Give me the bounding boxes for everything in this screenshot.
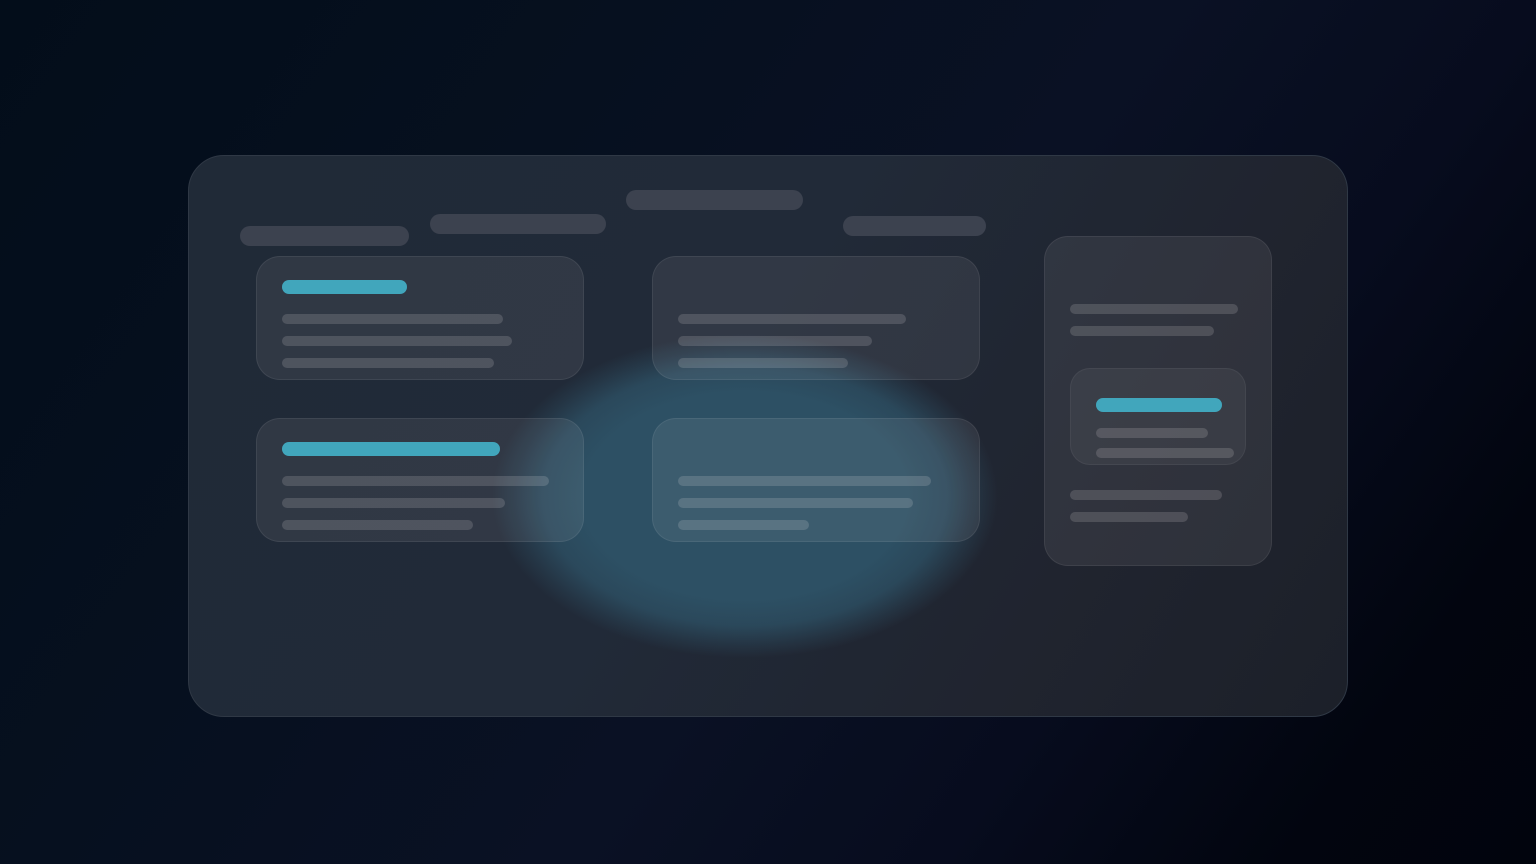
- panel: card bottom left: [256, 418, 584, 542]
- text line: [678, 520, 809, 530]
- text line: [678, 476, 931, 486]
- text line: [1096, 448, 1234, 458]
- text line: [282, 476, 549, 486]
- heading pill 4: [843, 216, 986, 236]
- panel: card bottom middle: [652, 418, 980, 542]
- accent title: [282, 280, 407, 294]
- panel: card top middle: [652, 256, 980, 380]
- heading pill 2: [430, 214, 606, 234]
- text line: [678, 498, 913, 508]
- text line: [678, 314, 906, 324]
- text line: [282, 336, 512, 346]
- text line: [678, 336, 872, 346]
- panel: card top left: [256, 256, 584, 380]
- heading pill 3: [626, 190, 803, 210]
- text line: [1070, 512, 1188, 522]
- text line: [678, 358, 848, 368]
- panel: main glass panel: [188, 155, 1348, 717]
- panel: right column card: [1044, 236, 1272, 566]
- text line: [1070, 326, 1214, 336]
- text line: [1070, 304, 1238, 314]
- text line: [1070, 490, 1222, 500]
- text line: [282, 520, 473, 530]
- text line: [282, 314, 503, 324]
- text line: [1096, 428, 1208, 438]
- teal glow: [492, 334, 998, 658]
- accent title: [282, 442, 500, 456]
- text line: [282, 498, 505, 508]
- accent title: [1096, 398, 1222, 412]
- text line: [282, 358, 494, 368]
- heading pill 1: [240, 226, 409, 246]
- panel: nested card: [1070, 368, 1246, 465]
